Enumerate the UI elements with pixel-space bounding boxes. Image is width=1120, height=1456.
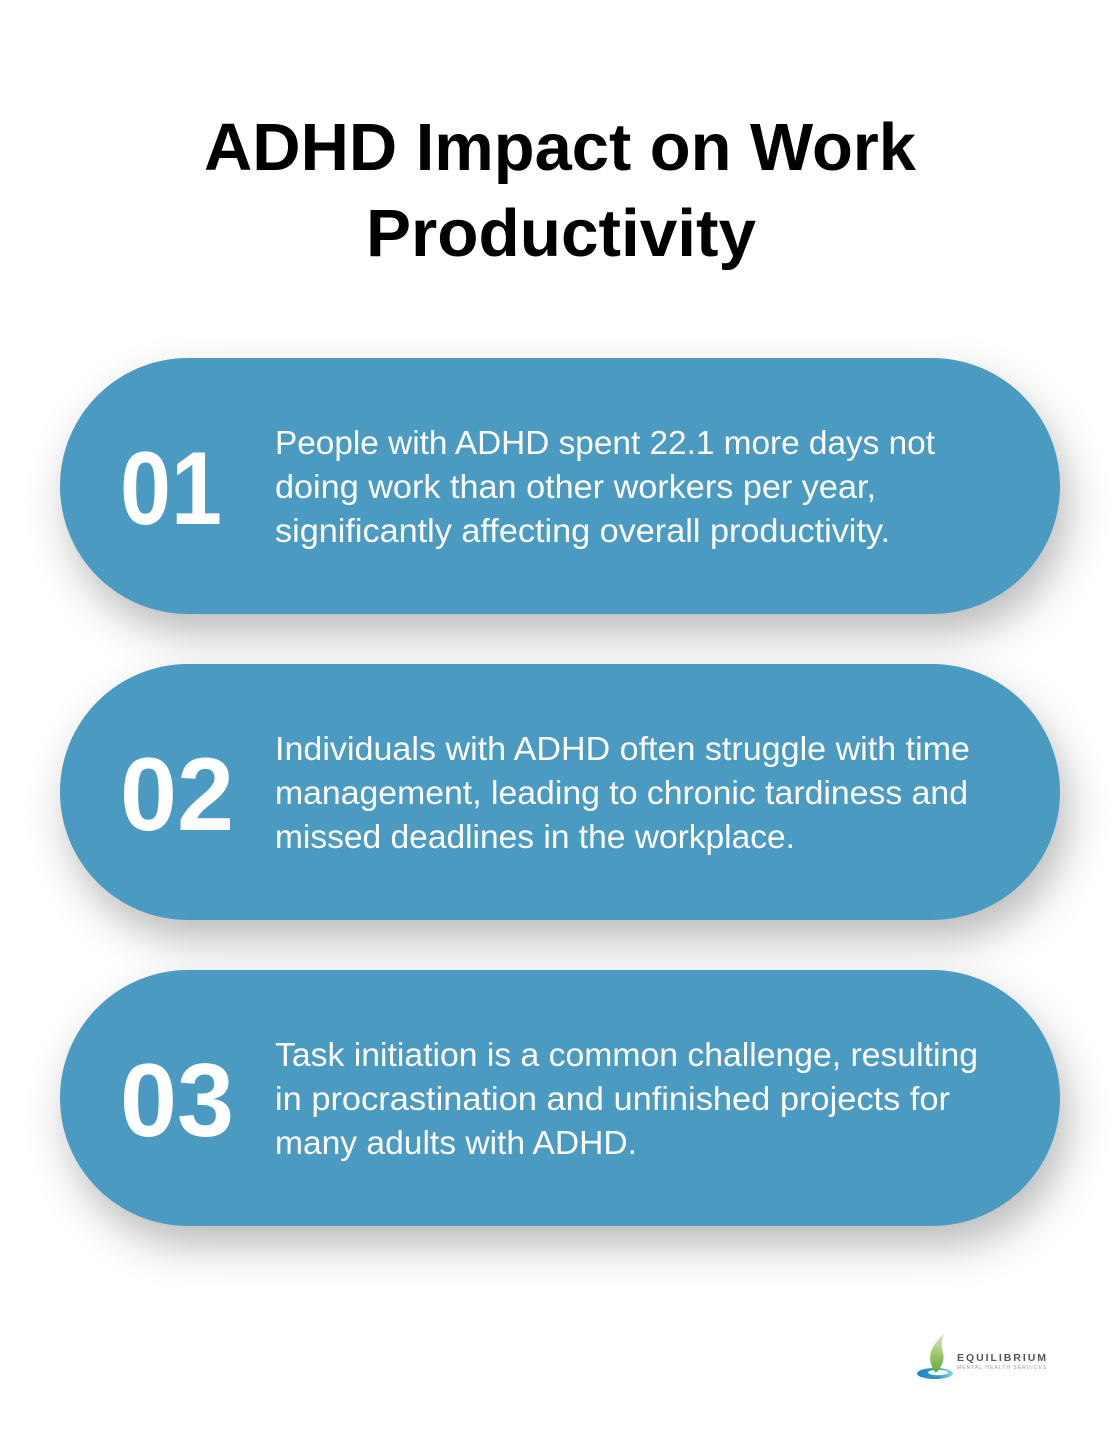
title xyxy=(204,110,917,271)
text block 03 xyxy=(275,1036,978,1161)
text block 01: People with ADHD spent 22.1 more days not xyxy=(275,424,935,461)
number 01: 01 xyxy=(120,431,222,547)
number 03: 03 xyxy=(120,1043,234,1159)
panel: card 02 xyxy=(60,664,1060,920)
icon: Equilibrium logo xyxy=(917,1333,1047,1379)
text block 02: Individuals with ADHD often struggle with time xyxy=(275,730,970,767)
icon: Equilibrium logo: MENTAL HEALTH SERVICES xyxy=(957,1365,1047,1371)
text block 01 xyxy=(275,424,935,549)
text block 01: doing work than other workers per year, xyxy=(275,468,876,505)
number 02: 02 xyxy=(120,737,234,853)
panel: card 01 xyxy=(60,358,1060,614)
text block 02: missed deadlines in the workplace. xyxy=(275,818,795,855)
text block 03: many adults with ADHD. xyxy=(275,1124,637,1161)
title: Productivity xyxy=(366,196,756,271)
panel: card 03 xyxy=(60,970,1060,1226)
icon: Equilibrium logo: EQUILIBRIUM xyxy=(957,1352,1046,1364)
title: ADHD Impact on Work xyxy=(204,110,917,185)
text block 02: management, leading to chronic tardiness and xyxy=(275,774,968,811)
text block 01: significantly affecting overall productivity. xyxy=(275,512,890,549)
text block 03: Task initiation is a common challenge, resulting xyxy=(275,1036,978,1073)
text block 02 xyxy=(275,730,970,855)
text block 03: in procrastination and unfinished projects for xyxy=(275,1080,950,1117)
